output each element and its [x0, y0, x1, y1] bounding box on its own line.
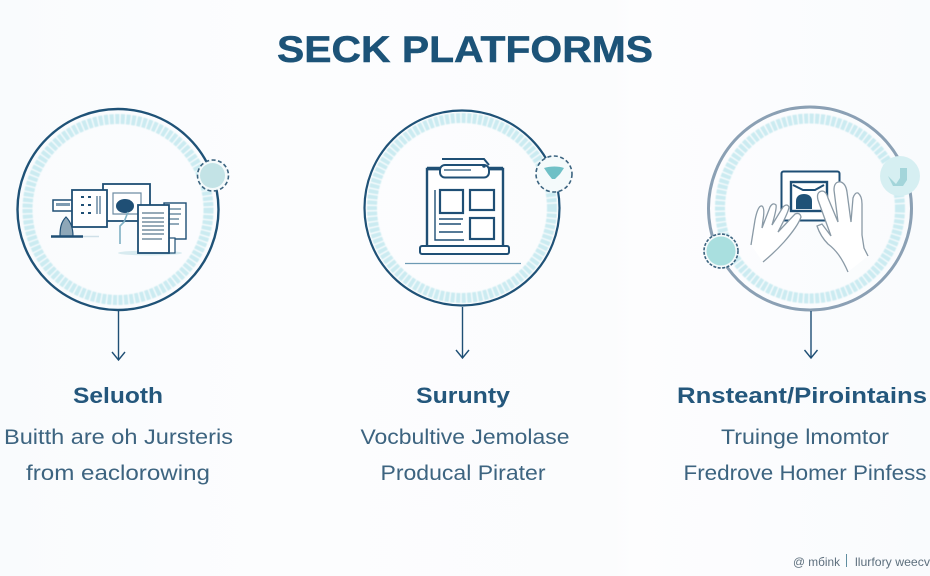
text: Surunty description [360, 426, 570, 485]
panel: Surunty [360, 110, 572, 485]
text: Rnsteant description [684, 426, 926, 485]
badge 2 [536, 156, 572, 192]
panel: Seluoth [4, 109, 233, 485]
heading: Seluoth: Seluoth [73, 383, 163, 408]
heading: Surunty: Surunty [416, 383, 511, 408]
badge 3 top [880, 156, 920, 196]
icon: hands on tablet [751, 172, 868, 272]
circle ring 3 [708, 107, 912, 310]
text: Surunty description: Vocbultive Jemolase [360, 426, 570, 449]
text: Seluoth description: from eaclorowing [26, 462, 210, 485]
footer credit: @ mбink [793, 555, 841, 569]
badge 3 bottom [704, 234, 738, 268]
icon: documents and screens [51, 184, 186, 256]
circle ring 1 [18, 109, 218, 310]
footer credit: llurfory weecv [855, 555, 930, 569]
text: Seluoth description: Buitth are oh Jursteris [4, 426, 233, 449]
arrow 3 [804, 311, 818, 358]
heading: Rnsteant/Pirointains: Rnsteant/Pirointains [677, 383, 927, 408]
icon: clipboard layout [405, 159, 521, 264]
footer credit [793, 554, 930, 569]
text: Surunty description: Producal Pirater [380, 462, 546, 485]
text: Seluoth description [4, 426, 233, 485]
title: SECK PLATFORMS [277, 29, 653, 70]
arrow 2 [456, 307, 469, 358]
arrow 1 [112, 311, 125, 360]
badge 1 [198, 160, 228, 191]
text: Rnsteant description: Truinge lmomtor [721, 426, 889, 449]
panel: Rnsteant/Pirointains [677, 107, 927, 485]
text: Rnsteant description: Fredrove Homer Pinfess [684, 462, 926, 485]
circle ring 2 [364, 110, 560, 306]
